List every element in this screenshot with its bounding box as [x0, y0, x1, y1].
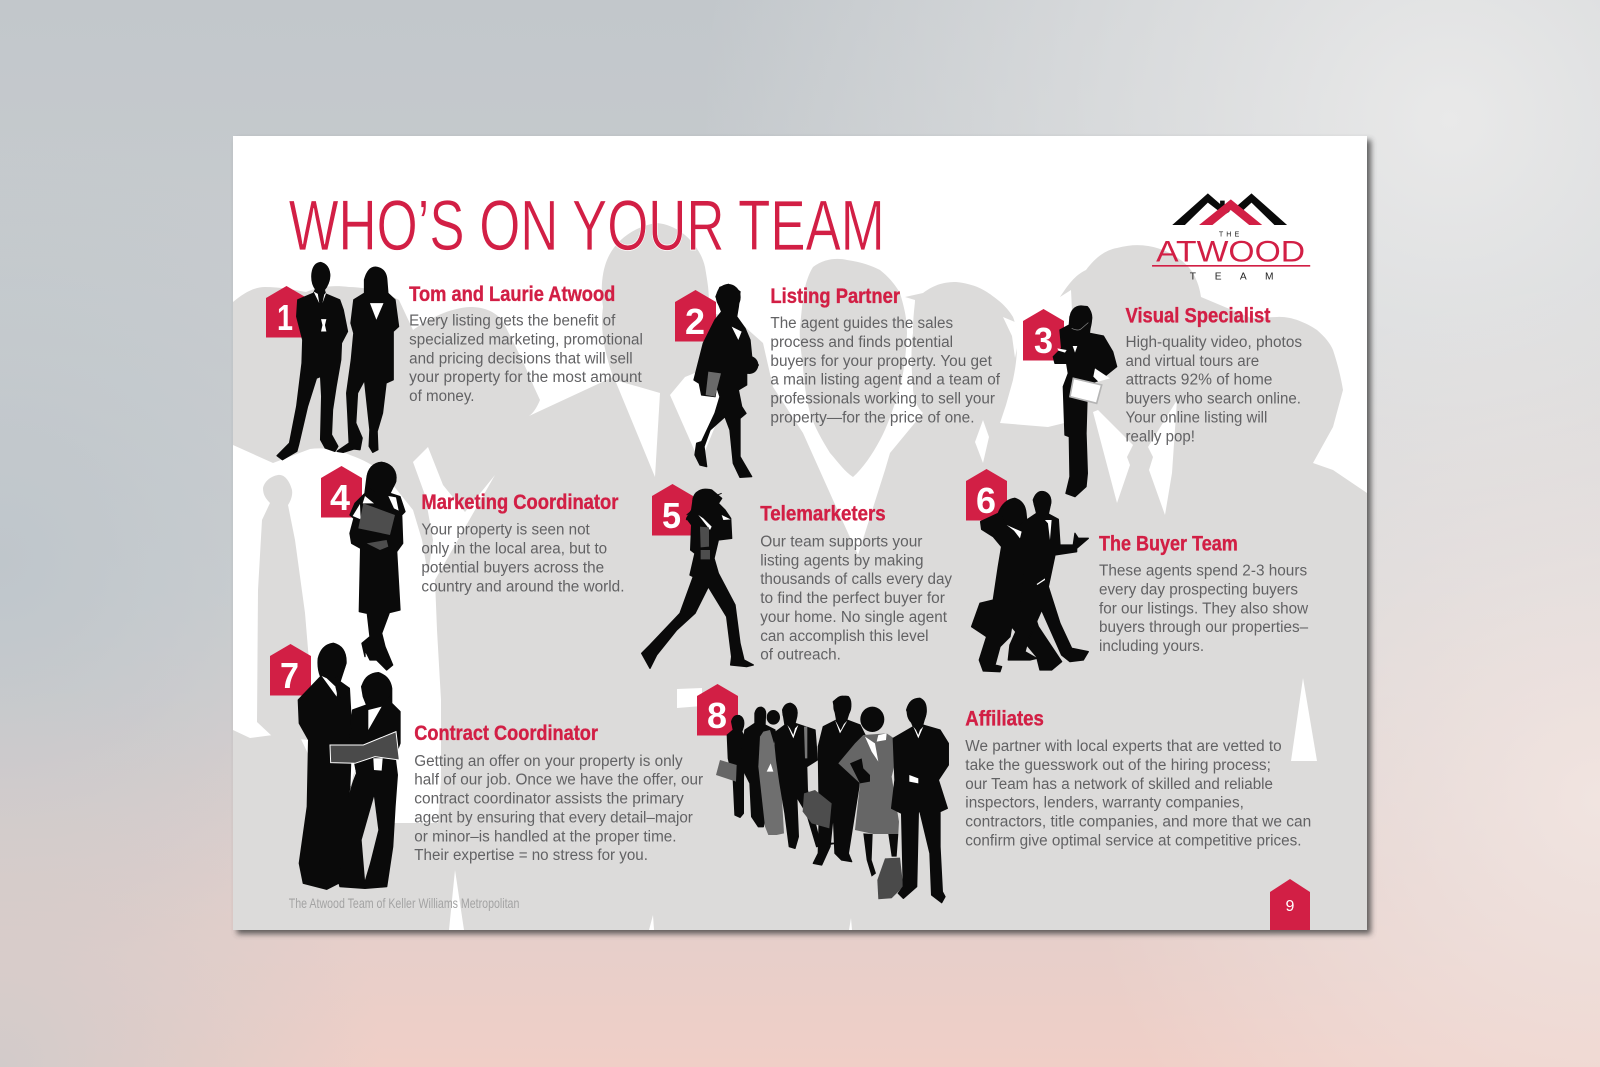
text 6: buyers through our properties– — [1099, 619, 1308, 636]
white collars and gaps — [233, 445, 495, 823]
text 7: Contract Coordinator — [414, 722, 598, 745]
badge 3: 3 — [1034, 320, 1053, 361]
text 4: Marketing Coordinator — [421, 491, 618, 514]
footer note: The Atwood Team of Keller Williams Metropolitan — [289, 896, 519, 911]
section 8: Affiliates — [697, 684, 1311, 903]
text 8 — [965, 708, 1311, 849]
text 4: only in the local area, but to — [421, 541, 607, 558]
text 8: our Team has a network of skilled and reliable — [965, 776, 1273, 793]
figure: woman with folder — [350, 462, 405, 670]
text 5: to find the perfect buyer for — [760, 590, 945, 607]
text 7: contract coordinator assists the primary — [414, 791, 684, 808]
text 4 — [421, 491, 624, 595]
text 7: Their expertise = no stress for you. — [414, 847, 648, 864]
text 3: Visual Specialist — [1126, 304, 1270, 327]
logo wordmark: THE — [1219, 231, 1242, 239]
text 5 — [760, 502, 952, 664]
logo wordmark — [1152, 231, 1310, 283]
badge 5: 5 — [662, 495, 681, 536]
text 3: buyers who search online. — [1126, 391, 1301, 408]
badge 4: 4 — [330, 477, 350, 518]
section 1: Tom and Laurie Atwood — [266, 263, 643, 460]
text 5: can accomplish this level — [760, 628, 929, 645]
text 5: your home. No single agent — [760, 609, 948, 626]
text 1: Every listing gets the benefit of — [409, 313, 616, 330]
text 5: listing agents by making — [760, 552, 923, 569]
text 2: property—for the price of one. — [770, 409, 974, 426]
figures: man and woman reading book — [298, 643, 400, 889]
text 3: and virtual tours are — [1126, 353, 1259, 370]
text 5: thousands of calls every day — [760, 571, 952, 588]
text 3: High-quality video, photos — [1126, 334, 1302, 351]
badge 6: 6 — [976, 480, 996, 521]
logo wordmark: ATWOOD — [1156, 236, 1305, 269]
text 8: contractors, title companies, and more that we can — [965, 814, 1311, 831]
text 3: Your online listing will — [1126, 409, 1267, 426]
figure: walking woman — [694, 284, 758, 477]
text 2: buyers for your property. You get — [770, 353, 992, 370]
text 2: The agent guides the sales — [770, 315, 953, 332]
text 1: of money. — [409, 388, 474, 405]
section 7: Contract Coordinator — [270, 643, 703, 889]
logo wordmark: T E A M — [1190, 272, 1273, 283]
text 3: attracts 92% of home — [1126, 372, 1273, 389]
figures: man and woman — [277, 263, 398, 460]
badge 2 — [675, 290, 716, 342]
badge 7: 7 — [280, 655, 299, 696]
section 6: The Buyer Team — [966, 469, 1309, 672]
section 5: Telemarketers — [642, 484, 952, 668]
text 1: your property for the most amount — [409, 369, 642, 386]
text 5: Our team supports your — [760, 533, 922, 550]
section 3: Visual Specialist — [1023, 304, 1302, 497]
logo: The Atwood Team — [1152, 193, 1310, 283]
text 3: really pop! — [1126, 428, 1195, 445]
text 6: for our listings. They also show — [1099, 600, 1309, 617]
text 1: Tom and Laurie Atwood — [409, 283, 615, 306]
page sheet — [233, 136, 1367, 930]
background crowd silhouette — [233, 223, 1367, 930]
text 1 — [409, 283, 643, 405]
text 7: or minor–is handled at the proper time. — [414, 828, 677, 845]
text 3 — [1126, 304, 1302, 445]
text 8: take the guesswork out of the hiring process; — [965, 757, 1271, 774]
badge 3 — [1023, 309, 1064, 361]
text 7: agent by ensuring that every detail–major — [414, 809, 693, 826]
text 8: confirm give optimal service at competitive prices. — [965, 832, 1302, 849]
text 2: process and finds potential — [770, 334, 953, 351]
text 7 — [414, 722, 703, 864]
figures: couple walking — [972, 491, 1088, 672]
page number badge: 9 — [1286, 898, 1295, 915]
page shadow — [237, 140, 1371, 934]
section 4: Marketing Coordinator — [321, 462, 624, 670]
text 1: and pricing decisions that will sell — [409, 350, 633, 367]
text 7: half of our job. Once we have the offer, our — [414, 772, 703, 789]
text 8: Affiliates — [965, 708, 1044, 731]
big grey head — [800, 259, 907, 477]
badge 5 — [652, 484, 693, 536]
text 4: potential buyers across the — [421, 559, 604, 576]
badge 8: 8 — [707, 695, 727, 736]
section 2: Listing Partner — [675, 284, 1001, 477]
badge 1 — [266, 286, 307, 338]
text 4: country and around the world. — [421, 578, 624, 595]
figure: striding woman on phone — [642, 489, 753, 668]
text 6: including yours. — [1099, 638, 1204, 655]
badge 1: 1 — [277, 297, 293, 338]
text 6: These agents spend 2-3 hours — [1099, 563, 1307, 580]
badge 4 — [321, 466, 362, 518]
text 8: inspectors, lenders, warranty companies, — [965, 795, 1244, 812]
page number badge — [1270, 879, 1310, 930]
text 4: Your property is seen not — [421, 522, 590, 539]
text 8: We partner with local experts that are vetted to — [965, 738, 1282, 755]
text 2: a main listing agent and a team of — [770, 372, 1001, 389]
icon: roofs — [1172, 193, 1287, 225]
text 6: The Buyer Team — [1099, 533, 1238, 556]
text 6: every day prospecting buyers — [1099, 581, 1298, 598]
text 2 — [770, 285, 1001, 426]
text 2: Listing Partner — [770, 285, 900, 308]
text 5: of outreach. — [760, 647, 841, 664]
figures: group of people — [716, 696, 948, 903]
title: WHO’S ON YOUR TEAM — [289, 186, 885, 266]
text 5: Telemarketers — [760, 502, 886, 525]
text 6 — [1099, 533, 1309, 655]
text 7: Getting an offer on your property is only — [414, 753, 683, 770]
badge 2: 2 — [685, 301, 705, 342]
badge 6 — [966, 469, 1007, 521]
badge 7 — [270, 644, 311, 696]
text 1: specialized marketing, promotional — [409, 331, 643, 348]
badge 8 — [697, 684, 738, 736]
text 2: professionals working to sell your — [770, 391, 995, 408]
figure: woman on phone — [1053, 305, 1117, 497]
